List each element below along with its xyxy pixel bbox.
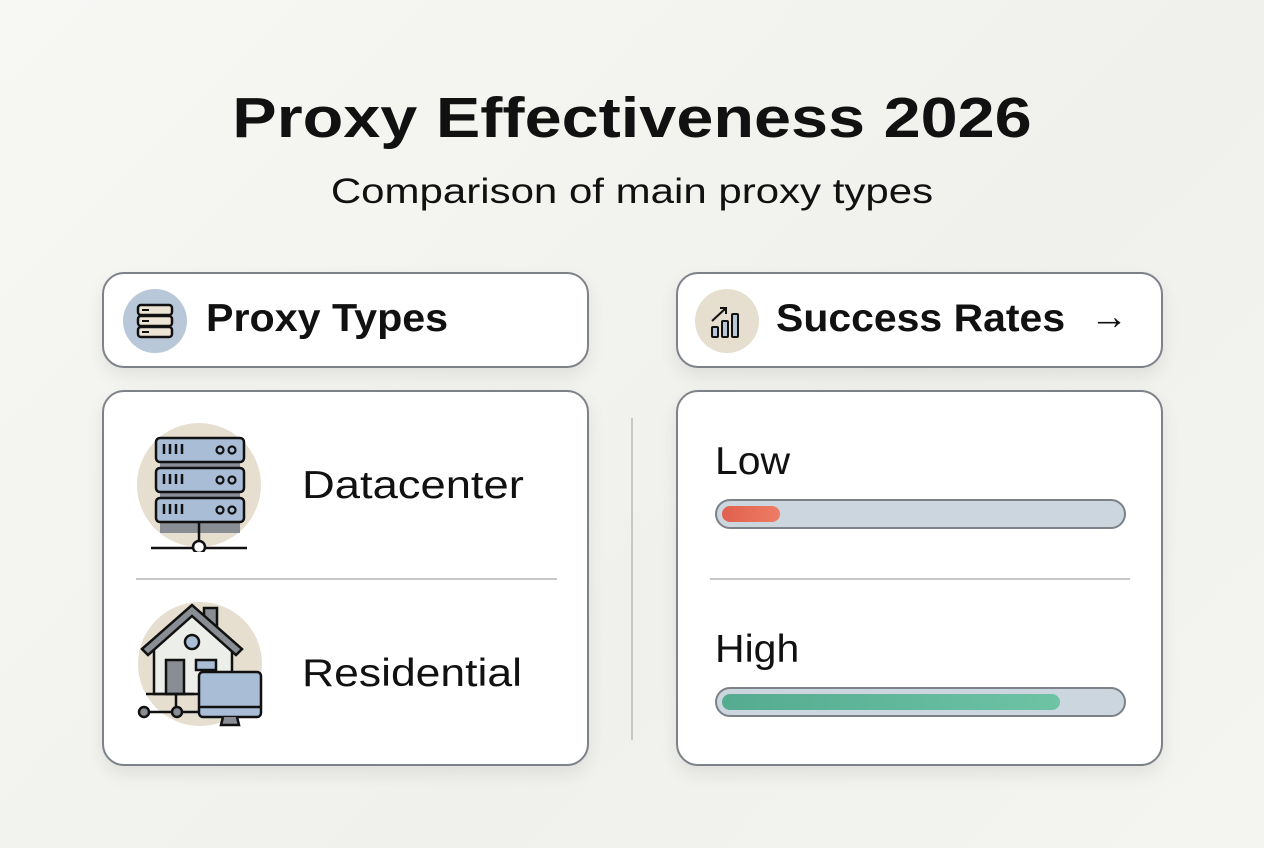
panel header: success rates — [676, 272, 1163, 368]
heading: Success Rates — [776, 297, 1065, 340]
heading: Proxy Types — [206, 297, 448, 340]
label: low: Low — [715, 440, 790, 483]
icon: server stack — [123, 289, 187, 353]
bar: low — [715, 499, 1126, 529]
panel: success rates — [676, 390, 1163, 766]
bar: high — [715, 687, 1126, 717]
panel: proxy types list — [102, 390, 589, 766]
icon: chart — [695, 289, 759, 353]
vertical divider — [631, 418, 633, 740]
arrow: → — [1090, 296, 1128, 338]
subtitle: Comparison of main proxy types — [331, 172, 933, 211]
title: Proxy Effectiveness 2026 — [232, 86, 1032, 150]
icon: residential — [138, 602, 262, 726]
icon: datacenter — [137, 423, 261, 552]
panel header: proxy types — [102, 272, 589, 368]
label: datacenter: Datacenter — [302, 464, 524, 507]
label: high: High — [715, 628, 799, 671]
label: residential: Residential — [302, 652, 522, 695]
